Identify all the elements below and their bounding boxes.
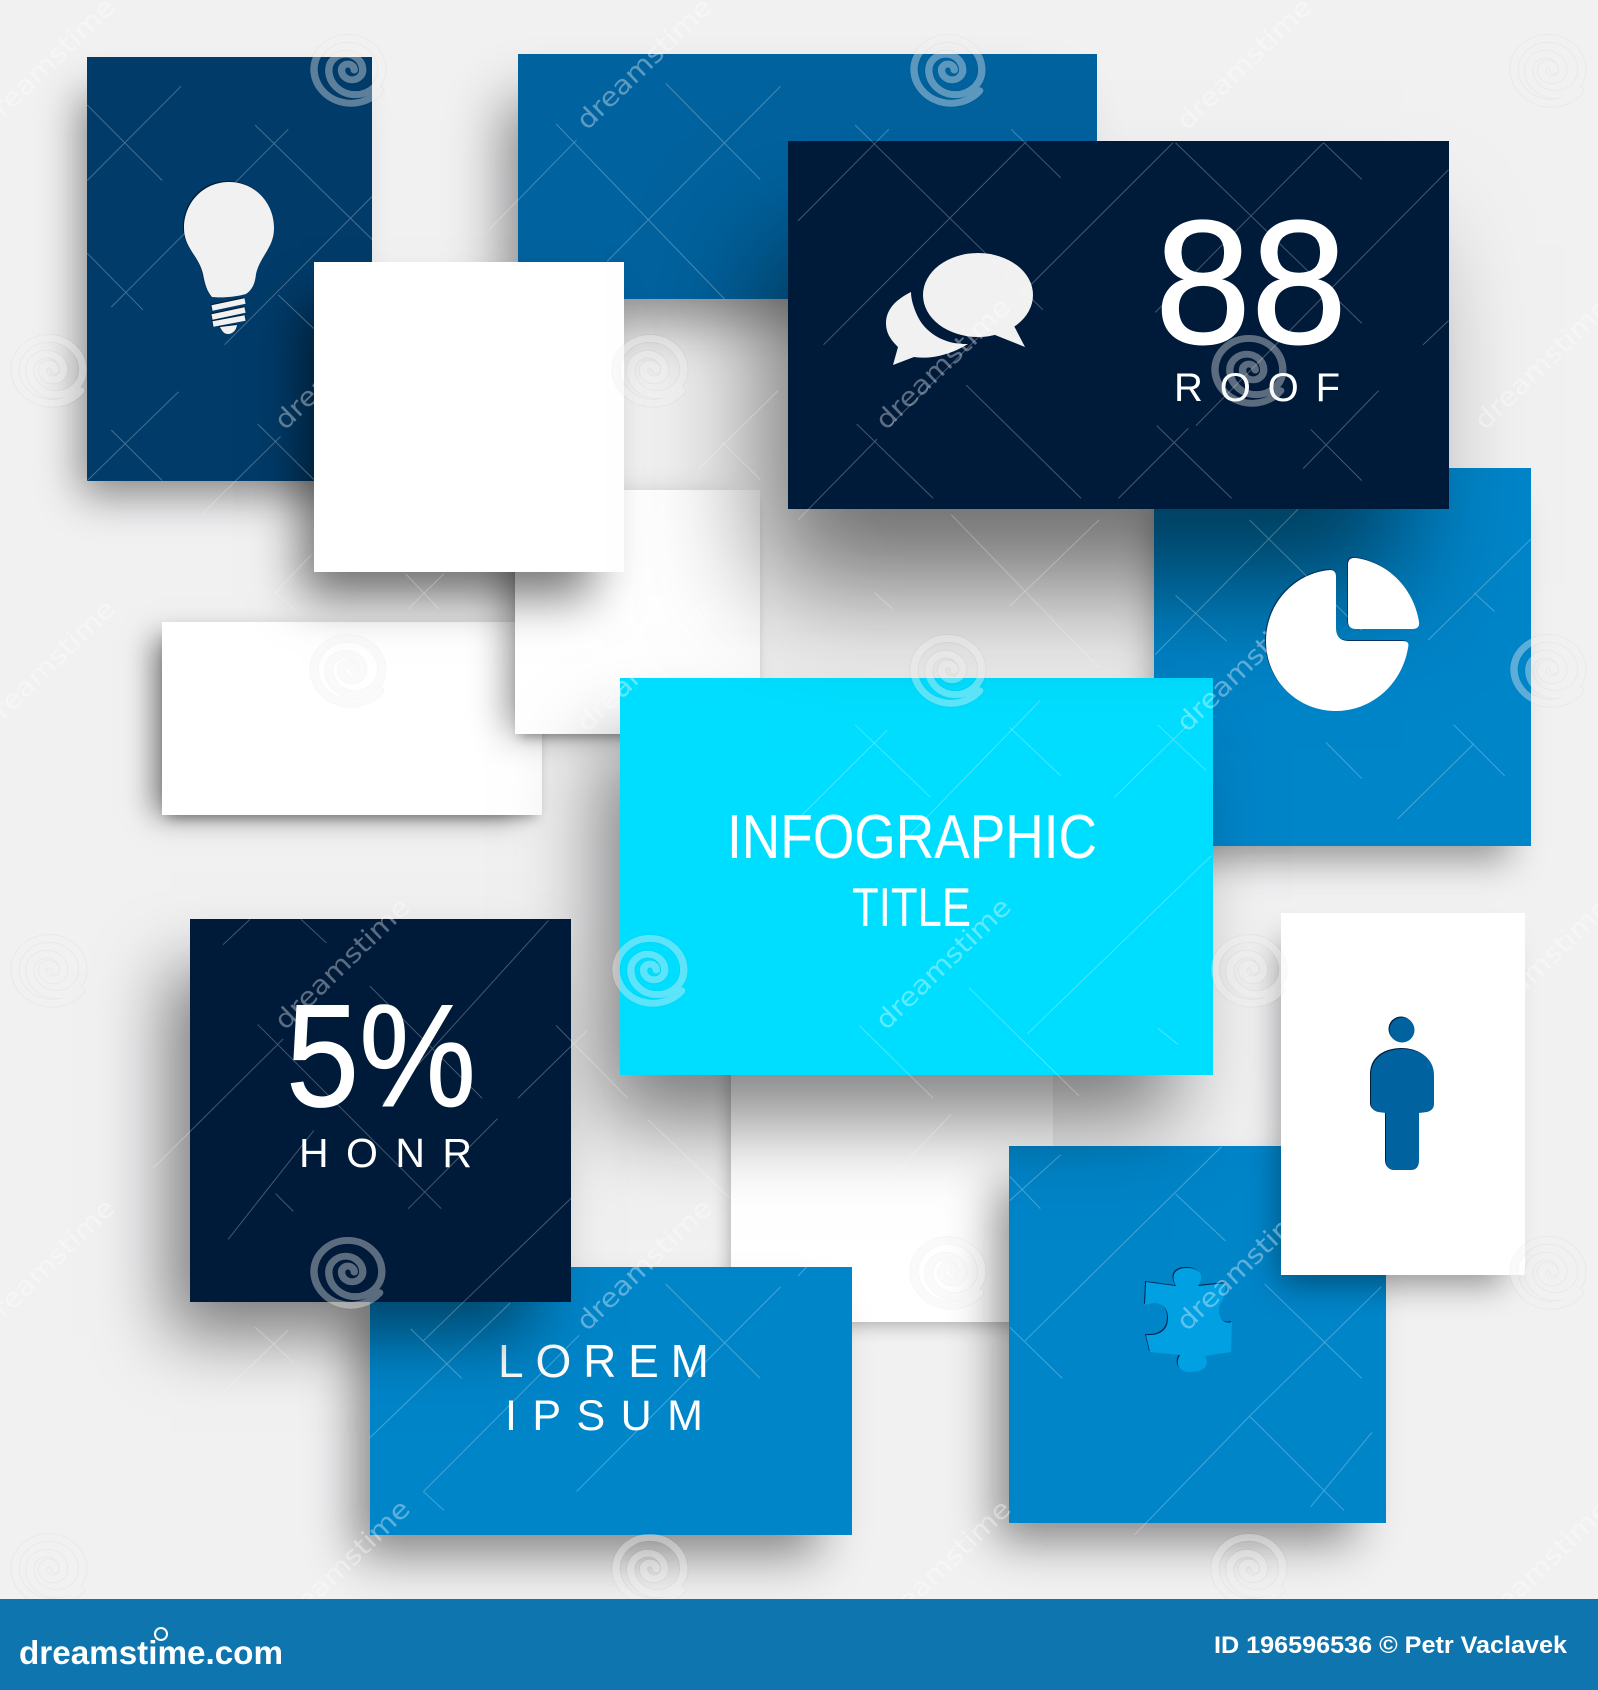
panel: blue puzzle card [1009, 1146, 1386, 1523]
footer bar [0, 1599, 1598, 1690]
watermark overlay: crossed lines, spirals and diagonal text: dreamstime [571, 1193, 718, 1337]
label: honr: HONR [299, 1130, 472, 1176]
watermark overlay: crossed lines, spirals and diagonal text: dreamstime [1171, 594, 1318, 738]
watermark overlay: crossed lines, spirals and diagonal text: dreamstime [870, 1494, 1017, 1638]
icon: person [1370, 1016, 1434, 1170]
panel: white person card [1281, 913, 1525, 1275]
icon: pie chart [1265, 556, 1420, 711]
panel: dark stat card 88 roof [788, 141, 1449, 509]
text: lorem ipsum: LOREM [498, 1335, 709, 1387]
panel: blue pie chart card [1154, 468, 1531, 846]
panel: mid blue top sheet [518, 54, 1097, 299]
text: lorem ipsum: IPSUM [505, 1392, 703, 1440]
watermark overlay: crossed lines, spirals and diagonal text: dreamstime [269, 292, 416, 436]
panel: white sheet centre [515, 490, 760, 734]
label: roof: ROOF [1174, 366, 1340, 410]
icon: puzzle piece [1144, 1267, 1232, 1372]
footer: site name: dreamstime.com [19, 1634, 283, 1671]
stat: 5 percent: 5% [286, 974, 476, 1137]
watermark overlay: crossed lines, spirals and diagonal text: dreamstime [571, 0, 718, 136]
watermark overlay: crossed lines, spirals and diagonal text: dreamstime [269, 1494, 416, 1638]
watermark overlay: crossed lines, spirals and diagonal text: dreamstime [269, 892, 416, 1036]
title: title word: TITLE [852, 876, 971, 938]
panel: white empty card [314, 262, 624, 572]
title: infographic: INFOGRAPHIC [727, 803, 1097, 872]
text: lorem ipsum [498, 1335, 709, 1440]
watermark overlay: crossed lines, spirals and diagonal text: dreamstime [571, 594, 718, 738]
stat: 88: 88 [1155, 185, 1347, 381]
panel: cyan title card [620, 678, 1213, 1075]
panel: blue lorem ipsum card [370, 1267, 852, 1535]
icon: light bulb [183, 181, 274, 334]
footer: image id and credit: ID 196596536 © Petr Vaclavek [1214, 1632, 1568, 1659]
panel: navy lightbulb card [87, 57, 372, 481]
watermark overlay: crossed lines, spirals and diagonal text: dreamstime [1171, 1193, 1318, 1337]
icon: speech bubbles [886, 253, 1033, 365]
panel: white wide sheet left [162, 622, 542, 815]
watermark overlay: crossed lines, spirals and diagonal text: dreamstime [870, 892, 1017, 1036]
watermark overlay: crossed lines, spirals and diagonal text: dreamstime [870, 292, 1017, 436]
panel: dark stat card 5% honr [190, 919, 571, 1302]
panel: white sheet behind bottom centre [731, 1040, 1053, 1322]
watermark overlay: crossed lines, spirals and diagonal text: dreamstime [1171, 0, 1318, 136]
